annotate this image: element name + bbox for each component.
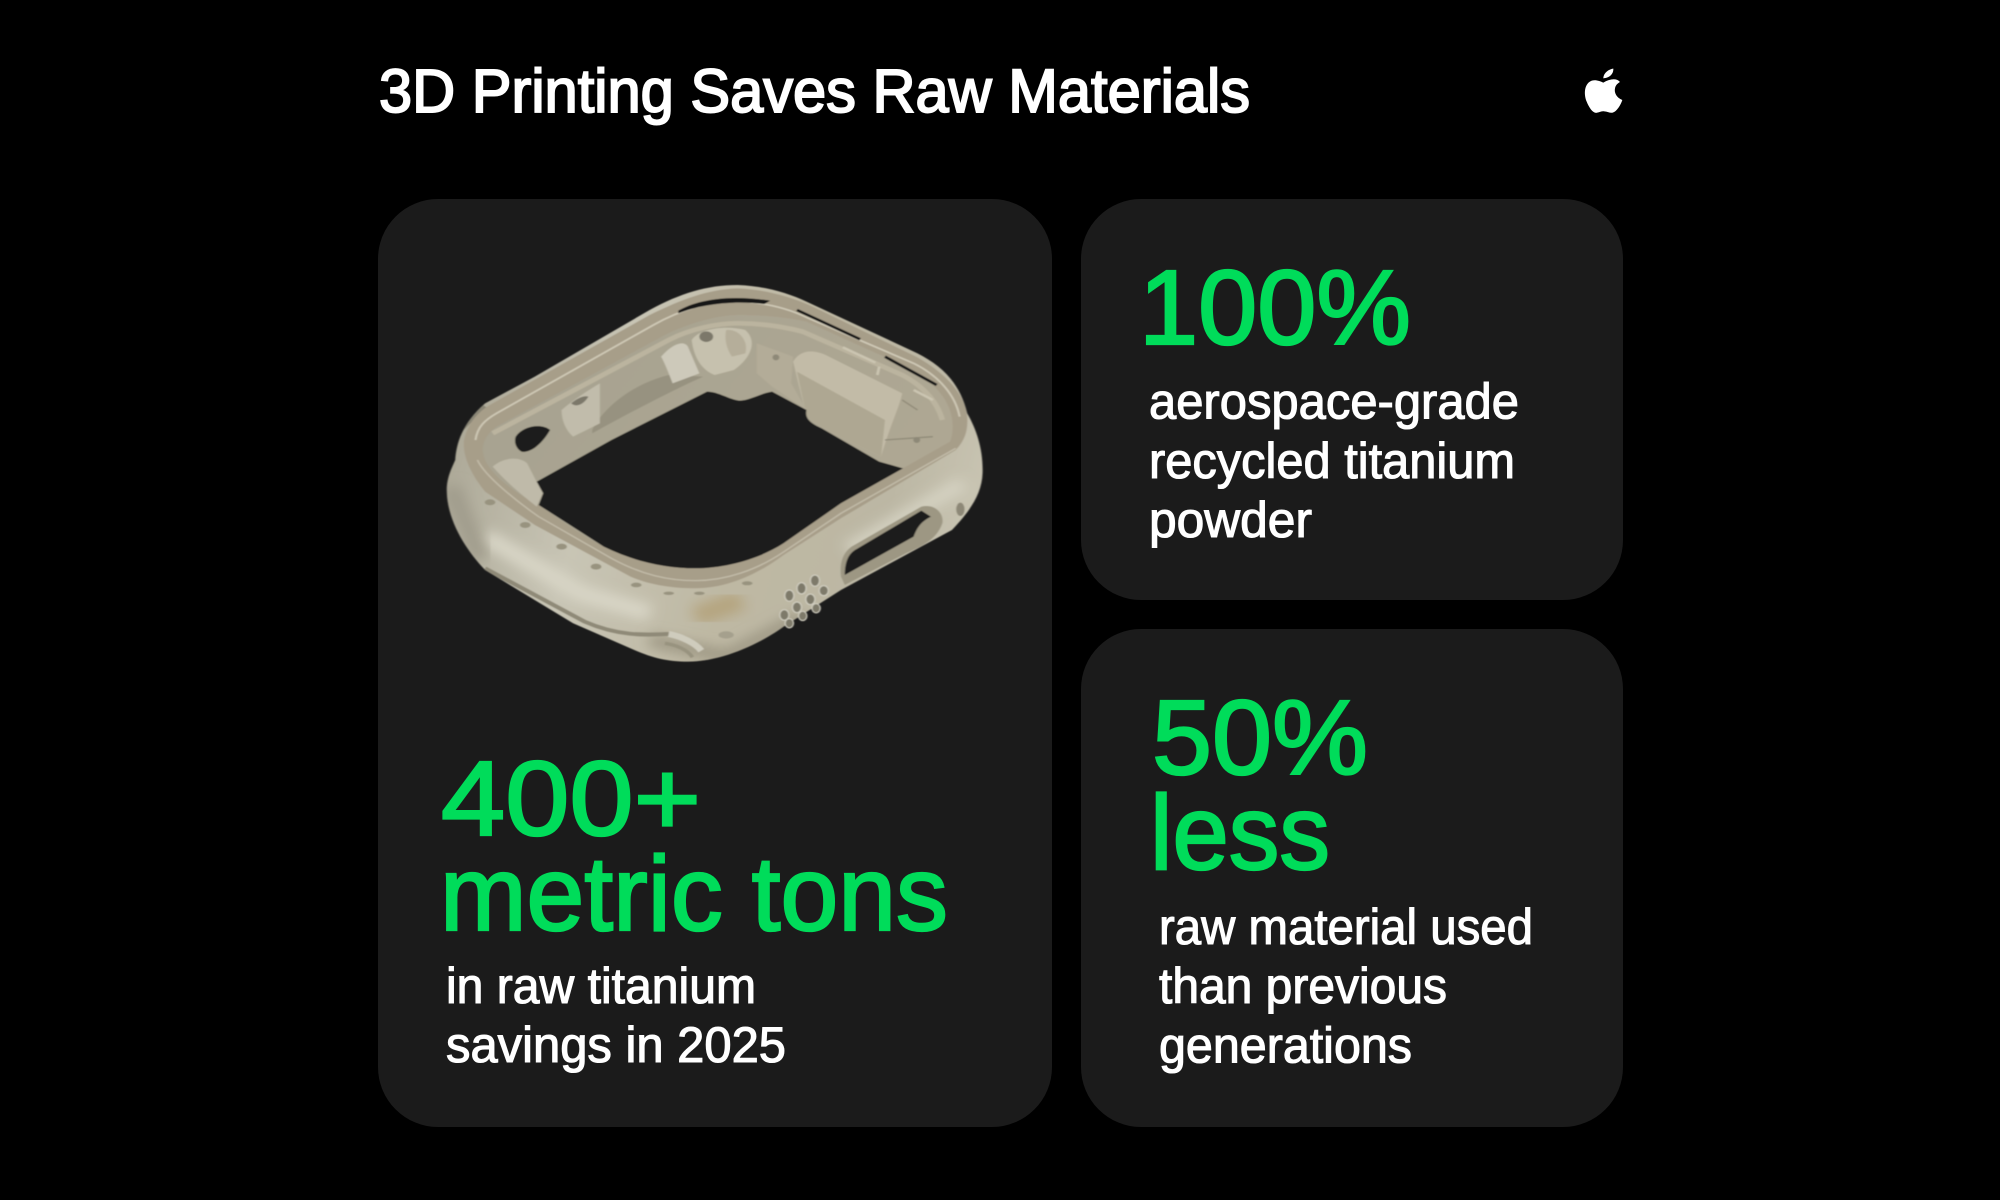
description bbox=[1159, 899, 1533, 1074]
rim bbox=[464, 288, 967, 588]
description: powder bbox=[1149, 492, 1312, 548]
side slot bbox=[841, 506, 943, 585]
stat: less: less bbox=[1150, 774, 1330, 892]
icon: apple logo bbox=[1585, 69, 1622, 113]
stat: 100%: 100% bbox=[1139, 249, 1411, 367]
description: savings in 2025 bbox=[446, 1017, 786, 1073]
central opening bbox=[537, 392, 903, 568]
description bbox=[1149, 374, 1519, 548]
title: 3D Printing Saves Raw Materials bbox=[379, 57, 1250, 125]
top slots bbox=[678, 298, 770, 313]
description: generations bbox=[1159, 1018, 1412, 1074]
stat: 50%: 50% bbox=[1152, 679, 1368, 797]
panel: 400+ metric tons bbox=[378, 199, 1052, 1127]
description: than previous bbox=[1159, 958, 1447, 1014]
image: 3D printed titanium watch case bbox=[447, 285, 983, 662]
speaker holes bbox=[780, 575, 828, 628]
panel: 50% less bbox=[1081, 629, 1623, 1127]
description: aerospace-grade bbox=[1149, 374, 1519, 430]
description: in raw titanium bbox=[446, 958, 756, 1014]
description: raw material used bbox=[1159, 899, 1533, 955]
inner walls bbox=[483, 315, 953, 568]
panel: 100% bbox=[1081, 199, 1623, 600]
description: recycled titanium bbox=[1149, 433, 1515, 489]
description bbox=[446, 958, 786, 1073]
lower groove bbox=[485, 568, 669, 635]
small holes bbox=[485, 499, 753, 639]
stat: 400+: 400+ bbox=[441, 740, 701, 858]
stat: metric tons: metric tons bbox=[440, 835, 948, 953]
